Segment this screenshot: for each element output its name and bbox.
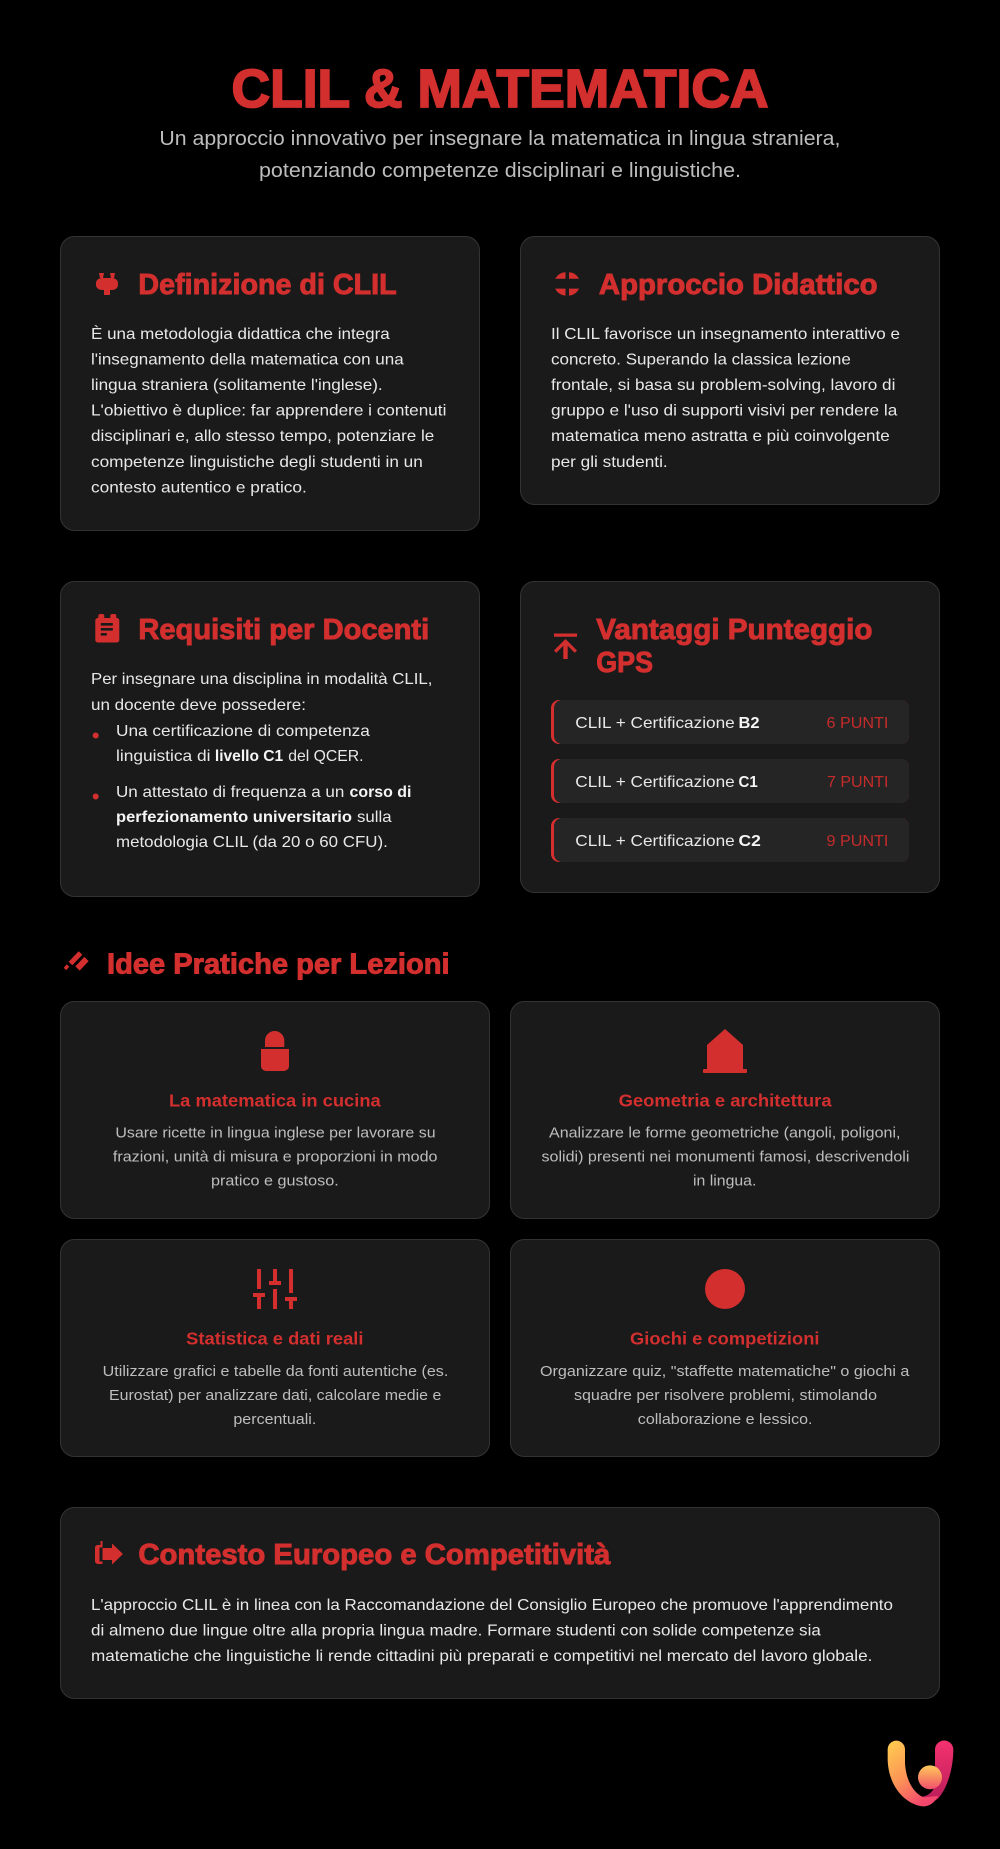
intro text: un docente deve possedere: <box>91 697 306 714</box>
text block: solidi) presenti nei monumenti famosi, descrivendoli <box>542 1150 909 1166</box>
score row C2: CLIL + Certificazione <box>575 833 735 850</box>
icon: plug <box>96 273 118 295</box>
text block: disciplinari e, allo stesso tempo, potenziare le <box>91 428 434 445</box>
heading: GPS <box>596 647 653 679</box>
text block: pratico e gustoso. <box>211 1174 339 1190</box>
icon: pencil strokes <box>65 953 86 969</box>
icon: quartered circle <box>555 272 579 296</box>
text block: L'obiettivo è duplice: far apprendere i contenuti <box>91 403 446 420</box>
score row C1: C1 <box>738 774 758 791</box>
heading: Vantaggi Punteggio <box>596 614 872 646</box>
title: CLIL & MATEMATICA <box>232 59 768 119</box>
heading: Statistica e dati reali <box>186 1329 364 1349</box>
text block: frontale, si basa su problem-solving, lavoro di <box>551 377 895 394</box>
icon: jar <box>261 1031 289 1071</box>
text block: Utilizzare grafici e tabelle da fonti autentiche (es. <box>103 1364 448 1380</box>
subtitle: Un approccio innovativo per insegnare la matematica in lingua straniera, <box>159 128 840 150</box>
section heading: idee pratiche <box>65 948 450 980</box>
text block: in lingua. <box>693 1174 756 1190</box>
text block: L'approccio CLIL è in linea con la Raccomandazione del Consiglio Europeo che promuove l'apprendimento <box>91 1597 893 1614</box>
score row B2: 6 PUNTI <box>826 715 888 732</box>
list item: certificazione: livello C1 <box>215 748 283 765</box>
text block: l'insegnamento della matematica con una <box>91 351 404 368</box>
icon: exit arrow <box>95 1541 123 1564</box>
intro text: Per insegnare una disciplina in modalità CLIL, <box>91 671 432 688</box>
panel: requisiti per docenti <box>60 582 480 896</box>
heading: Approccio Didattico <box>599 269 878 301</box>
list item: corso: metodologia CLIL (da 20 o 60 CFU). <box>116 834 388 851</box>
list item: certificazione: linguistica di <box>116 748 210 765</box>
panel: geometria e architettura <box>510 1002 940 1218</box>
text block: percentuali. <box>233 1412 316 1428</box>
text block: Il CLIL favorisce un insegnamento interattivo e <box>551 326 900 343</box>
header <box>159 59 840 182</box>
text block <box>91 1597 893 1665</box>
score row C1: 7 PUNTI <box>827 774 888 791</box>
score row C1 <box>551 759 909 803</box>
text block <box>103 1364 448 1428</box>
heading: Giochi e competizioni <box>630 1329 820 1349</box>
panel: definizione di CLIL <box>60 236 480 530</box>
subtitle: potenziando competenze disciplinari e linguistiche. <box>259 160 741 182</box>
heading: Requisiti per Docenti <box>138 614 429 646</box>
text block: frazioni, unità di misura e proporzioni in modo <box>113 1150 438 1166</box>
score row B2 <box>551 700 909 744</box>
list item: corso: sulla <box>357 809 392 826</box>
icon: circle <box>705 1269 745 1309</box>
heading: Idee Pratiche per Lezioni <box>107 948 450 980</box>
score row C2 <box>551 818 909 862</box>
list item: certificazione: del QCER. <box>288 748 364 765</box>
heading: Geometria e architettura <box>619 1091 832 1111</box>
text block: concreto. Superando la classica lezione <box>551 351 851 368</box>
heading: La matematica in cucina <box>169 1091 381 1111</box>
panel: giochi e competizioni <box>510 1240 940 1456</box>
text block <box>542 1126 909 1190</box>
text block <box>551 326 900 471</box>
text block: collaborazione e lessico. <box>638 1412 812 1428</box>
text block: di almeno due lingue oltre alla propria lingua madre. Formare studenti con solide competenze sia <box>91 1623 821 1640</box>
score row C2: 9 PUNTI <box>826 833 888 850</box>
heading <box>596 614 872 679</box>
list item: corso <box>93 784 411 851</box>
list item: certificazione <box>93 723 370 765</box>
text block: Analizzare le forme geometriche (angoli, poligoni, <box>549 1126 900 1142</box>
subtitle <box>159 128 840 182</box>
score row C2: C2 <box>738 833 761 850</box>
text block: lingua straniera (solitamente l'inglese). <box>91 377 383 394</box>
text block: È una metodologia didattica che integra <box>91 324 390 343</box>
panel: statistica e dati reali <box>60 1240 490 1456</box>
list item: corso: corso di <box>350 784 411 801</box>
panel: la matematica in cucina <box>60 1002 490 1218</box>
list item: certificazione: Una certificazione di competenza <box>116 723 370 740</box>
text block <box>540 1364 909 1428</box>
text block: Usare ricette in lingua inglese per lavorare su <box>115 1126 436 1142</box>
panel: contesto europeo <box>60 1508 940 1698</box>
score row B2: CLIL + Certificazione <box>575 715 735 732</box>
panel: approccio didattico <box>520 236 940 504</box>
text block: matematica meno astratta e più coinvolgente <box>551 428 890 445</box>
text block <box>91 324 446 496</box>
icon: clipboard <box>95 614 119 642</box>
list item: corso: Un attestato di frequenza a un <box>116 784 344 801</box>
icon: logo <box>888 1740 953 1806</box>
text block: gruppo e l'uso di supporti visivi per rendere la <box>551 403 897 420</box>
intro text <box>91 671 432 714</box>
text block: matematiche che linguistiche li rende cittadini più preparati e competitivi nel mercato del lavoro globale. <box>91 1648 872 1665</box>
text block: Eurostat) per analizzare dati, calcolare medie e <box>109 1388 441 1404</box>
text block: competenze linguistiche degli studenti in un <box>91 454 423 471</box>
text block: per gli studenti. <box>551 454 668 471</box>
text block: contesto autentico e pratico. <box>91 479 307 496</box>
icon: arrow up to bar <box>554 634 577 659</box>
score row B2: B2 <box>738 715 760 732</box>
heading: Definizione di CLIL <box>138 269 397 301</box>
text block: squadre per risolvere problemi, stimolando <box>574 1388 877 1404</box>
list item: corso: perfezionamento universitario <box>116 809 352 826</box>
panel: vantaggi punteggio GPS <box>520 582 940 892</box>
text block: Organizzare quiz, "staffette matematiche" o giochi a <box>540 1364 909 1380</box>
text block <box>113 1126 438 1190</box>
heading: Contesto Europeo e Competitività <box>138 1539 611 1571</box>
score row C1: CLIL + Certificazione <box>575 774 735 791</box>
icon: sliders <box>253 1269 297 1309</box>
icon: building <box>703 1029 747 1073</box>
